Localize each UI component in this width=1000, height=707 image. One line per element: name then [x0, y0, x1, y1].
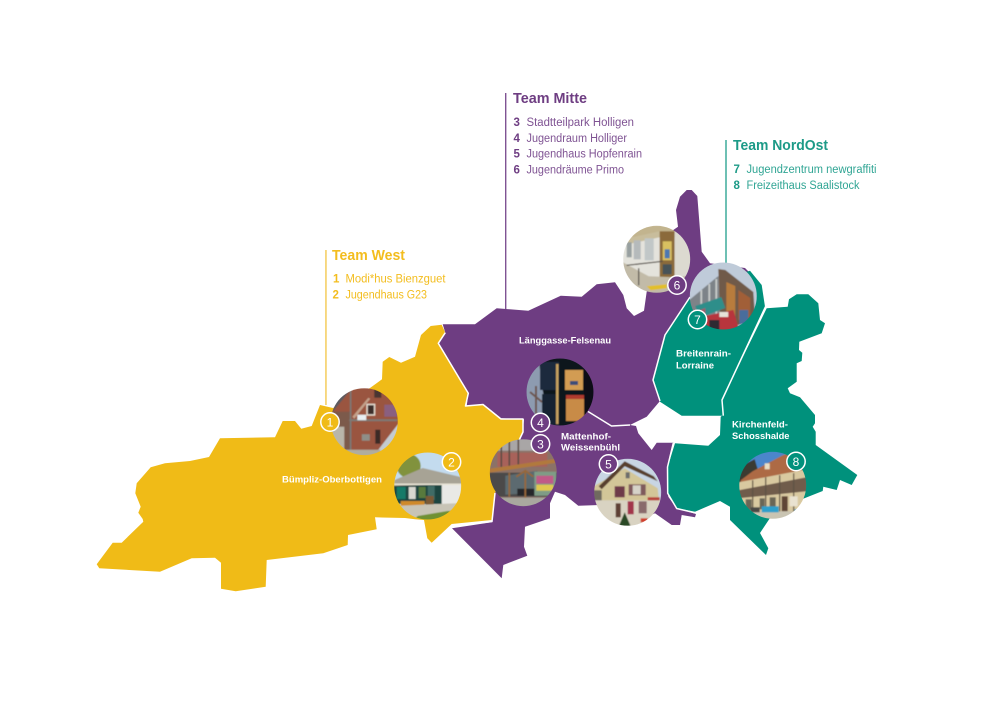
legend: Team Mitte: 4 — [514, 133, 520, 145]
legend: Team West: Modi*hus Bienzguet — [346, 274, 446, 286]
map label: Kirchenfeld-Schosshalde — [732, 420, 790, 441]
legend: Team Mitte: 6 — [514, 164, 520, 176]
district: Breitenrain-Lorraine — [653, 271, 765, 416]
map label: Breitenrain-Lorraine: Breitenrain- — [676, 348, 731, 358]
legend: Team West — [332, 248, 446, 302]
legend: Team Mitte: 5 — [514, 148, 520, 160]
badge 6: 6 — [674, 278, 681, 292]
map label: Kirchenfeld-Schosshalde: Schosshalde — [732, 431, 790, 441]
photo 1: Modi*hus Bienzguet — [330, 388, 398, 456]
map label: Breitenrain-Lorraine: Lorraine — [676, 360, 714, 370]
legend: Team NordOst: 8 — [734, 180, 740, 192]
badge 1: 1 — [327, 415, 334, 429]
photo 8: Freizeithaus Saalistock — [739, 451, 807, 519]
legend: Team NordOst: Freizeithaus Saalistock — [746, 180, 860, 192]
badge 4 — [531, 413, 550, 432]
legend: Team NordOst — [733, 138, 876, 192]
map label: Bümpliz-Oberbottigen: Bümpliz-Oberbottigen — [282, 474, 382, 484]
legend: Team Mitte — [513, 91, 642, 176]
legend: Team Mitte: Jugendhaus Hopfenrain — [526, 148, 642, 160]
badge 2: 2 — [448, 455, 455, 469]
legend: Team Mitte: Jugendraum Holliger — [526, 133, 627, 145]
legend: Team Mitte: Jugendräume Primo — [526, 164, 624, 176]
badge 6 — [668, 276, 686, 294]
badge 7: 7 — [694, 313, 701, 327]
badge 2 — [442, 453, 461, 471]
map label: Länggasse-Felsenau: Länggasse-Felsenau — [519, 336, 611, 346]
badge 1 — [321, 413, 339, 431]
map label: Breitenrain-Lorraine — [676, 348, 731, 370]
photo 4: Jugendraum Holliger — [526, 358, 594, 426]
connector line: Team West — [325, 250, 327, 405]
legend: Team NordOst: Team NordOst — [733, 138, 828, 154]
legend: Team West: Jugendhaus G23 — [346, 290, 427, 302]
map label: Mattenhof-Weissenbühl: Mattenhof- — [561, 432, 611, 442]
legend: Team Mitte: Team Mitte — [513, 91, 587, 107]
connector line: Team Mitte — [505, 93, 506, 309]
legend: Team NordOst: Jugendzentrum newgraffiti — [746, 164, 876, 176]
photo 7: Jugendzentrum newgraffiti — [689, 262, 757, 330]
legend: Team West: Team West — [332, 248, 405, 264]
photo 3: Stadtteilpark Holligen — [489, 439, 557, 507]
badge 8: 8 — [793, 455, 800, 469]
photo 6: Jugendräume Primo — [623, 225, 691, 293]
legend: Team West: 2 — [332, 290, 339, 302]
legend: Team Mitte: Stadtteilpark Holligen — [526, 117, 634, 129]
badge 7 — [688, 310, 707, 329]
map: districts of Bern — [97, 190, 857, 591]
badge 3: 3 — [537, 437, 544, 451]
legend: Team West: 1 — [333, 274, 340, 286]
district: Länggasse-Felsenau and Mattenhof-Weissenbühl — [438, 190, 750, 578]
photo 5: Jugendhaus Hopfenrain — [594, 458, 662, 526]
map label: Kirchenfeld-Schosshalde: Kirchenfeld- — [732, 420, 788, 430]
district: Kirchenfeld-Schosshalde — [668, 294, 857, 555]
badge 5 — [599, 455, 618, 473]
map label: Mattenhof-Weissenbühl: Weissenbühl — [561, 442, 620, 452]
map label: Mattenhof-Weissenbühl — [561, 432, 620, 452]
legend: Team NordOst: 7 — [734, 164, 740, 176]
badge 3 — [531, 435, 550, 453]
legend: Team Mitte: 3 — [514, 117, 520, 129]
badge 4: 4 — [537, 416, 544, 430]
photo 2: Jugendhaus G23 — [394, 452, 462, 520]
connector line: Team NordOst — [725, 140, 727, 264]
badge 8 — [787, 452, 805, 471]
badge 5: 5 — [605, 457, 612, 471]
district: Bümpliz-Oberbottigen — [97, 325, 523, 591]
